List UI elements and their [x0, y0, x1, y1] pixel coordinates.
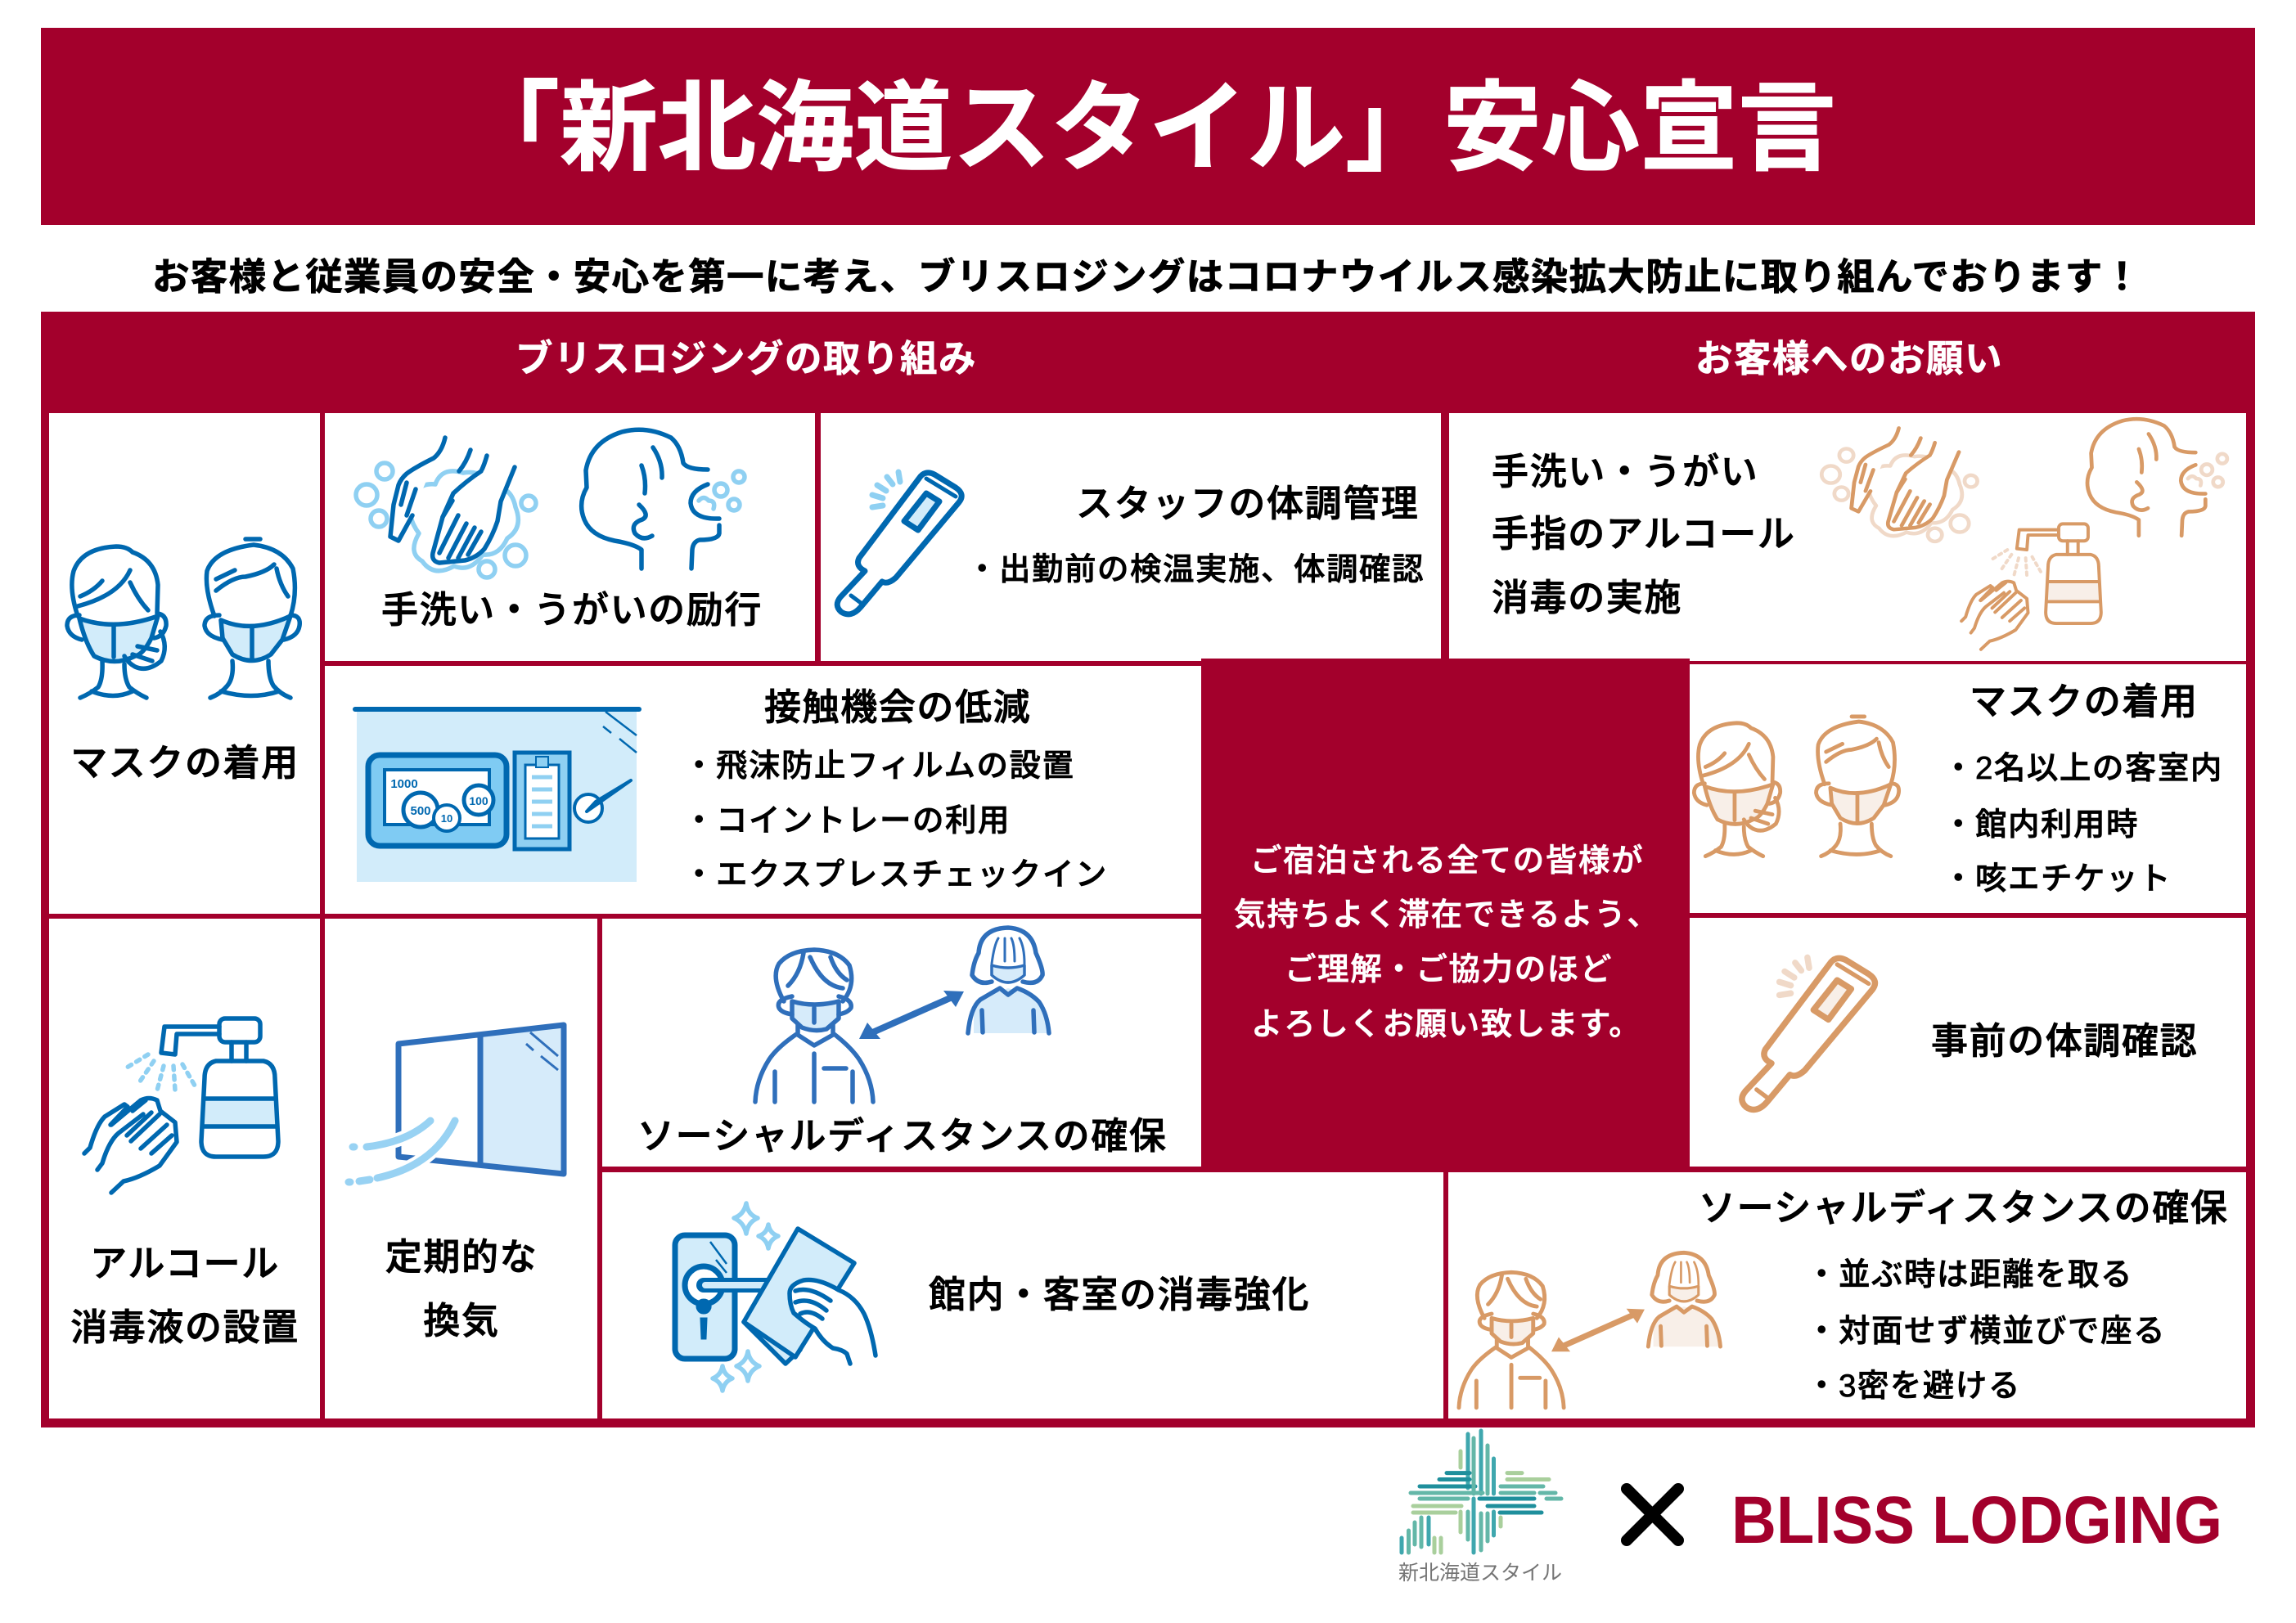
icon: two people with arrow: [755, 928, 1049, 1102]
panel: disinfection: [602, 1172, 1443, 1418]
heading: staff health: スタッフの体調管理: [1076, 483, 1419, 524]
title band: [41, 28, 2255, 225]
label: guest hygiene: 消毒の実施: [1492, 577, 1682, 618]
list: guest social distancing: ・対面せず横並びで座る: [1806, 1314, 2166, 1349]
list: reduced contact: ・飛沫防止フィルムの設置: [683, 749, 1074, 784]
icon: window and breeze: [349, 1025, 564, 1182]
heading: reduced contact: 接触機会の低減: [764, 686, 1031, 728]
text: center message: [1234, 843, 1660, 1042]
list: guest mask: [1943, 751, 2223, 897]
panel: guest social distancing: [1448, 1172, 2246, 1418]
label: disinfection: 館内・客室の消毒強化: [929, 1274, 1310, 1315]
label: alcohol disinfectant: 消毒液の設置: [70, 1306, 299, 1348]
label: ventilation: 換気: [423, 1300, 500, 1342]
list: guest mask: ・館内利用時: [1943, 807, 2139, 843]
cross mark: [1627, 1489, 1678, 1540]
list: reduced contact: [683, 749, 1108, 892]
heading: guest mask: マスクの着用: [1970, 681, 2199, 722]
title: 「新北海道スタイル」安心宣言: [461, 74, 1836, 183]
list: guest social distancing: ・並ぶ時は距離を取る: [1806, 1257, 2133, 1293]
panel: mask wearing: [49, 413, 320, 914]
heading: guest social distancing: ソーシャルディスタンスの確保: [1699, 1187, 2228, 1229]
logo: Bliss Lodging: BLISS LODGING: [1731, 1483, 2222, 1558]
list: guest social distancing: [1806, 1257, 2166, 1404]
label: guest hygiene: [1492, 451, 1795, 618]
icon: coin tray and film: 500: [410, 804, 431, 818]
icon: thermometer: [1742, 957, 1875, 1109]
text: center message: ご理解・ご協力のほど: [1285, 952, 1613, 987]
panel: staff health: [821, 413, 1441, 661]
label: guest hygiene: 手指のアルコール: [1492, 513, 1795, 555]
icon: thermometer: [837, 472, 961, 614]
text: center message: ご宿泊される全ての皆様が: [1250, 843, 1644, 879]
panel: guest health check: [1690, 918, 2246, 1167]
label: social distancing: ソーシャルディスタンスの確保: [637, 1115, 1167, 1157]
label: alcohol disinfectant: アルコール: [90, 1243, 280, 1284]
panel: ventilation: [325, 919, 597, 1418]
icon: coin tray and film: 100: [469, 794, 488, 807]
icon: masked faces: [1694, 717, 1899, 856]
label: ventilation: [385, 1236, 538, 1342]
intro sentence: お客様と従業員の安全・安心を第一に考え、ブリスロジングはコロナウイルス感染拡大防止に取り組んでおります！: [152, 256, 2141, 298]
panel: guest hygiene: [1449, 413, 2246, 661]
text: center message: よろしくお願い致します。: [1251, 1007, 1641, 1042]
icon: coin tray and film: [355, 709, 639, 882]
column heading: hotel efforts: ブリスロジングの取り組み: [515, 338, 977, 380]
main frame: [41, 312, 2255, 1427]
logo wordmark: 新北海道スタイル: [1398, 1562, 1562, 1585]
icon: washing hands, gargling, sanitizer: [1821, 419, 2227, 650]
label: ventilation: 定期的な: [385, 1236, 538, 1278]
icon: coin tray and film: 1000: [390, 777, 418, 791]
list: guest mask: ・咳エチケット: [1943, 861, 2172, 897]
panel: center message: [1201, 659, 1690, 1172]
panel: handwashing and gargling: [325, 413, 815, 661]
label: guest health check: 事前の体調確認: [1931, 1020, 2198, 1062]
list: reduced contact: ・コイントレーの利用: [683, 803, 1011, 838]
icon: masked faces: [67, 539, 299, 698]
icon: door handle and cloth: [675, 1203, 876, 1391]
logo: Shin-Hokkaido Style: [1398, 1431, 1562, 1585]
list: reduced contact: ・エクスプレスチェックイン: [683, 857, 1108, 892]
column heading: guest requests: お客様へのお願い: [1695, 338, 2003, 380]
panel: alcohol disinfectant: [49, 919, 320, 1418]
icon: two people with arrow: [1459, 1252, 1720, 1408]
list: guest mask: ・2名以上の客室内: [1943, 751, 2223, 786]
panel: reduced contact: [325, 666, 1201, 914]
label: guest hygiene: 手洗い・うがい: [1492, 451, 1758, 492]
panel: social distancing: [602, 919, 1201, 1167]
text: staff health detail: ・出勤前の検温実施、体調確認: [966, 552, 1425, 587]
label: mask: マスクの着用: [70, 742, 299, 784]
list: guest social distancing: ・3密を避ける: [1806, 1369, 2021, 1404]
icon: coin tray and film: 10: [441, 812, 452, 825]
label: handwashing: 手洗い・うがいの励行: [381, 589, 763, 631]
panel: guest mask: [1690, 664, 2246, 913]
label: alcohol disinfectant: [70, 1243, 299, 1348]
icon: sanitizer bottle and hands: [84, 1018, 278, 1193]
icon: washing hands and gargling: [356, 429, 745, 578]
text: center message: 気持ちよく滞在できるよう、: [1234, 897, 1660, 933]
